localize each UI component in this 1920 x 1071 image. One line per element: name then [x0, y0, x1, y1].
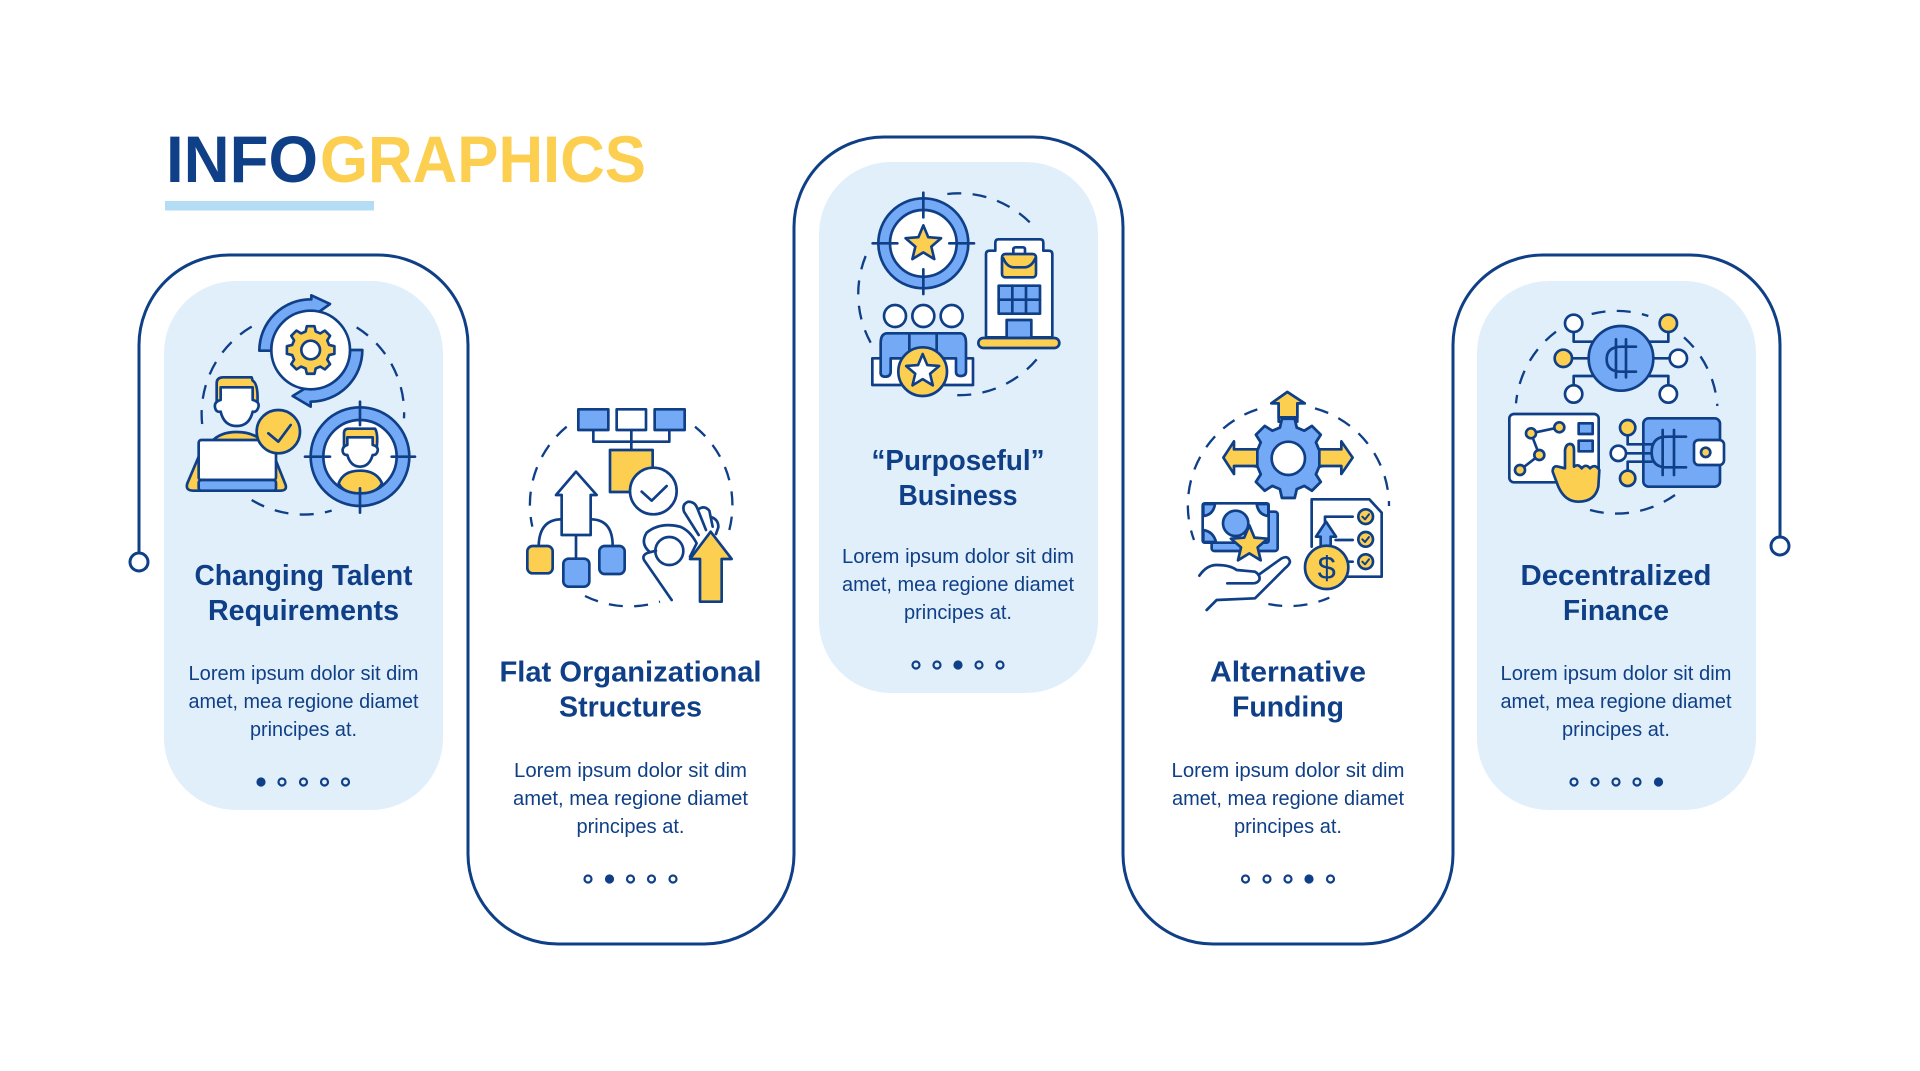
icon: target star, team and office [858, 193, 1059, 396]
connecting outline around all cards [130, 137, 1789, 944]
body text: amet, mea regione diamet [1172, 787, 1404, 810]
panel: card 3 background [819, 162, 1098, 693]
heading: Flat Organizational [500, 656, 762, 688]
body text: amet, mea regione diamet [842, 573, 1074, 596]
body text: principes at. [1562, 718, 1670, 741]
pagination dots [584, 876, 676, 882]
heading: Alternative [1210, 656, 1366, 688]
icon: crypto network, tablet and wallet [1509, 311, 1724, 514]
title: GRAPHICS [320, 122, 646, 196]
card 4: Alternative Funding [1172, 392, 1404, 882]
icon: org chart and okay hand [527, 409, 732, 606]
body text: Lorem ipsum dolor sit dim [1172, 759, 1404, 782]
icon: gear arrows, money and document: $ [1318, 549, 1336, 586]
body text [1500, 662, 1732, 741]
body text [842, 545, 1074, 624]
card 3: Purposeful Business [842, 193, 1074, 668]
heading [1520, 560, 1712, 627]
pagination dots [1242, 876, 1334, 882]
heading [500, 656, 762, 724]
body text [188, 662, 419, 741]
body text: principes at. [904, 601, 1012, 624]
pagination dots [912, 662, 1004, 668]
icon: gear arrows, money and document [1188, 392, 1389, 610]
heading: Funding [1232, 692, 1344, 724]
heading: Requirements [208, 595, 399, 627]
body text: principes at. [576, 815, 684, 838]
body text: amet, mea regione diamet [188, 690, 419, 713]
heading [872, 445, 1044, 512]
heading [194, 560, 413, 627]
body text [513, 759, 748, 838]
heading: Finance [1563, 595, 1669, 627]
title [165, 122, 646, 210]
icon: talent gear and people [187, 295, 415, 515]
body text: principes at. [250, 718, 357, 741]
title: INFO [166, 122, 318, 196]
body text: Lorem ipsum dolor sit dim [1500, 662, 1732, 685]
pagination dots [258, 778, 349, 786]
body text: Lorem ipsum dolor sit dim [842, 545, 1074, 568]
heading [1210, 656, 1366, 724]
body text: principes at. [1234, 815, 1342, 838]
panel: card 5 background [1477, 281, 1756, 810]
body text: amet, mea regione diamet [1500, 690, 1732, 713]
card 1: Changing Talent Requirements [187, 295, 419, 786]
heading: Structures [559, 692, 702, 724]
body text: Lorem ipsum dolor sit dim [188, 662, 418, 685]
heading: “Purposeful” [872, 445, 1044, 477]
card 5: Decentralized Finance [1500, 311, 1732, 786]
heading: Decentralized [1520, 560, 1712, 592]
body text [1172, 759, 1404, 838]
body text: Lorem ipsum dolor sit dim [514, 759, 747, 782]
pagination dots [1570, 778, 1662, 786]
card 2: Flat Organizational Structures [500, 409, 762, 882]
heading: Business [898, 480, 1018, 512]
heading: Changing Talent [194, 560, 413, 592]
panel: card 1 background [164, 281, 443, 810]
body text: amet, mea regione diamet [513, 787, 748, 810]
